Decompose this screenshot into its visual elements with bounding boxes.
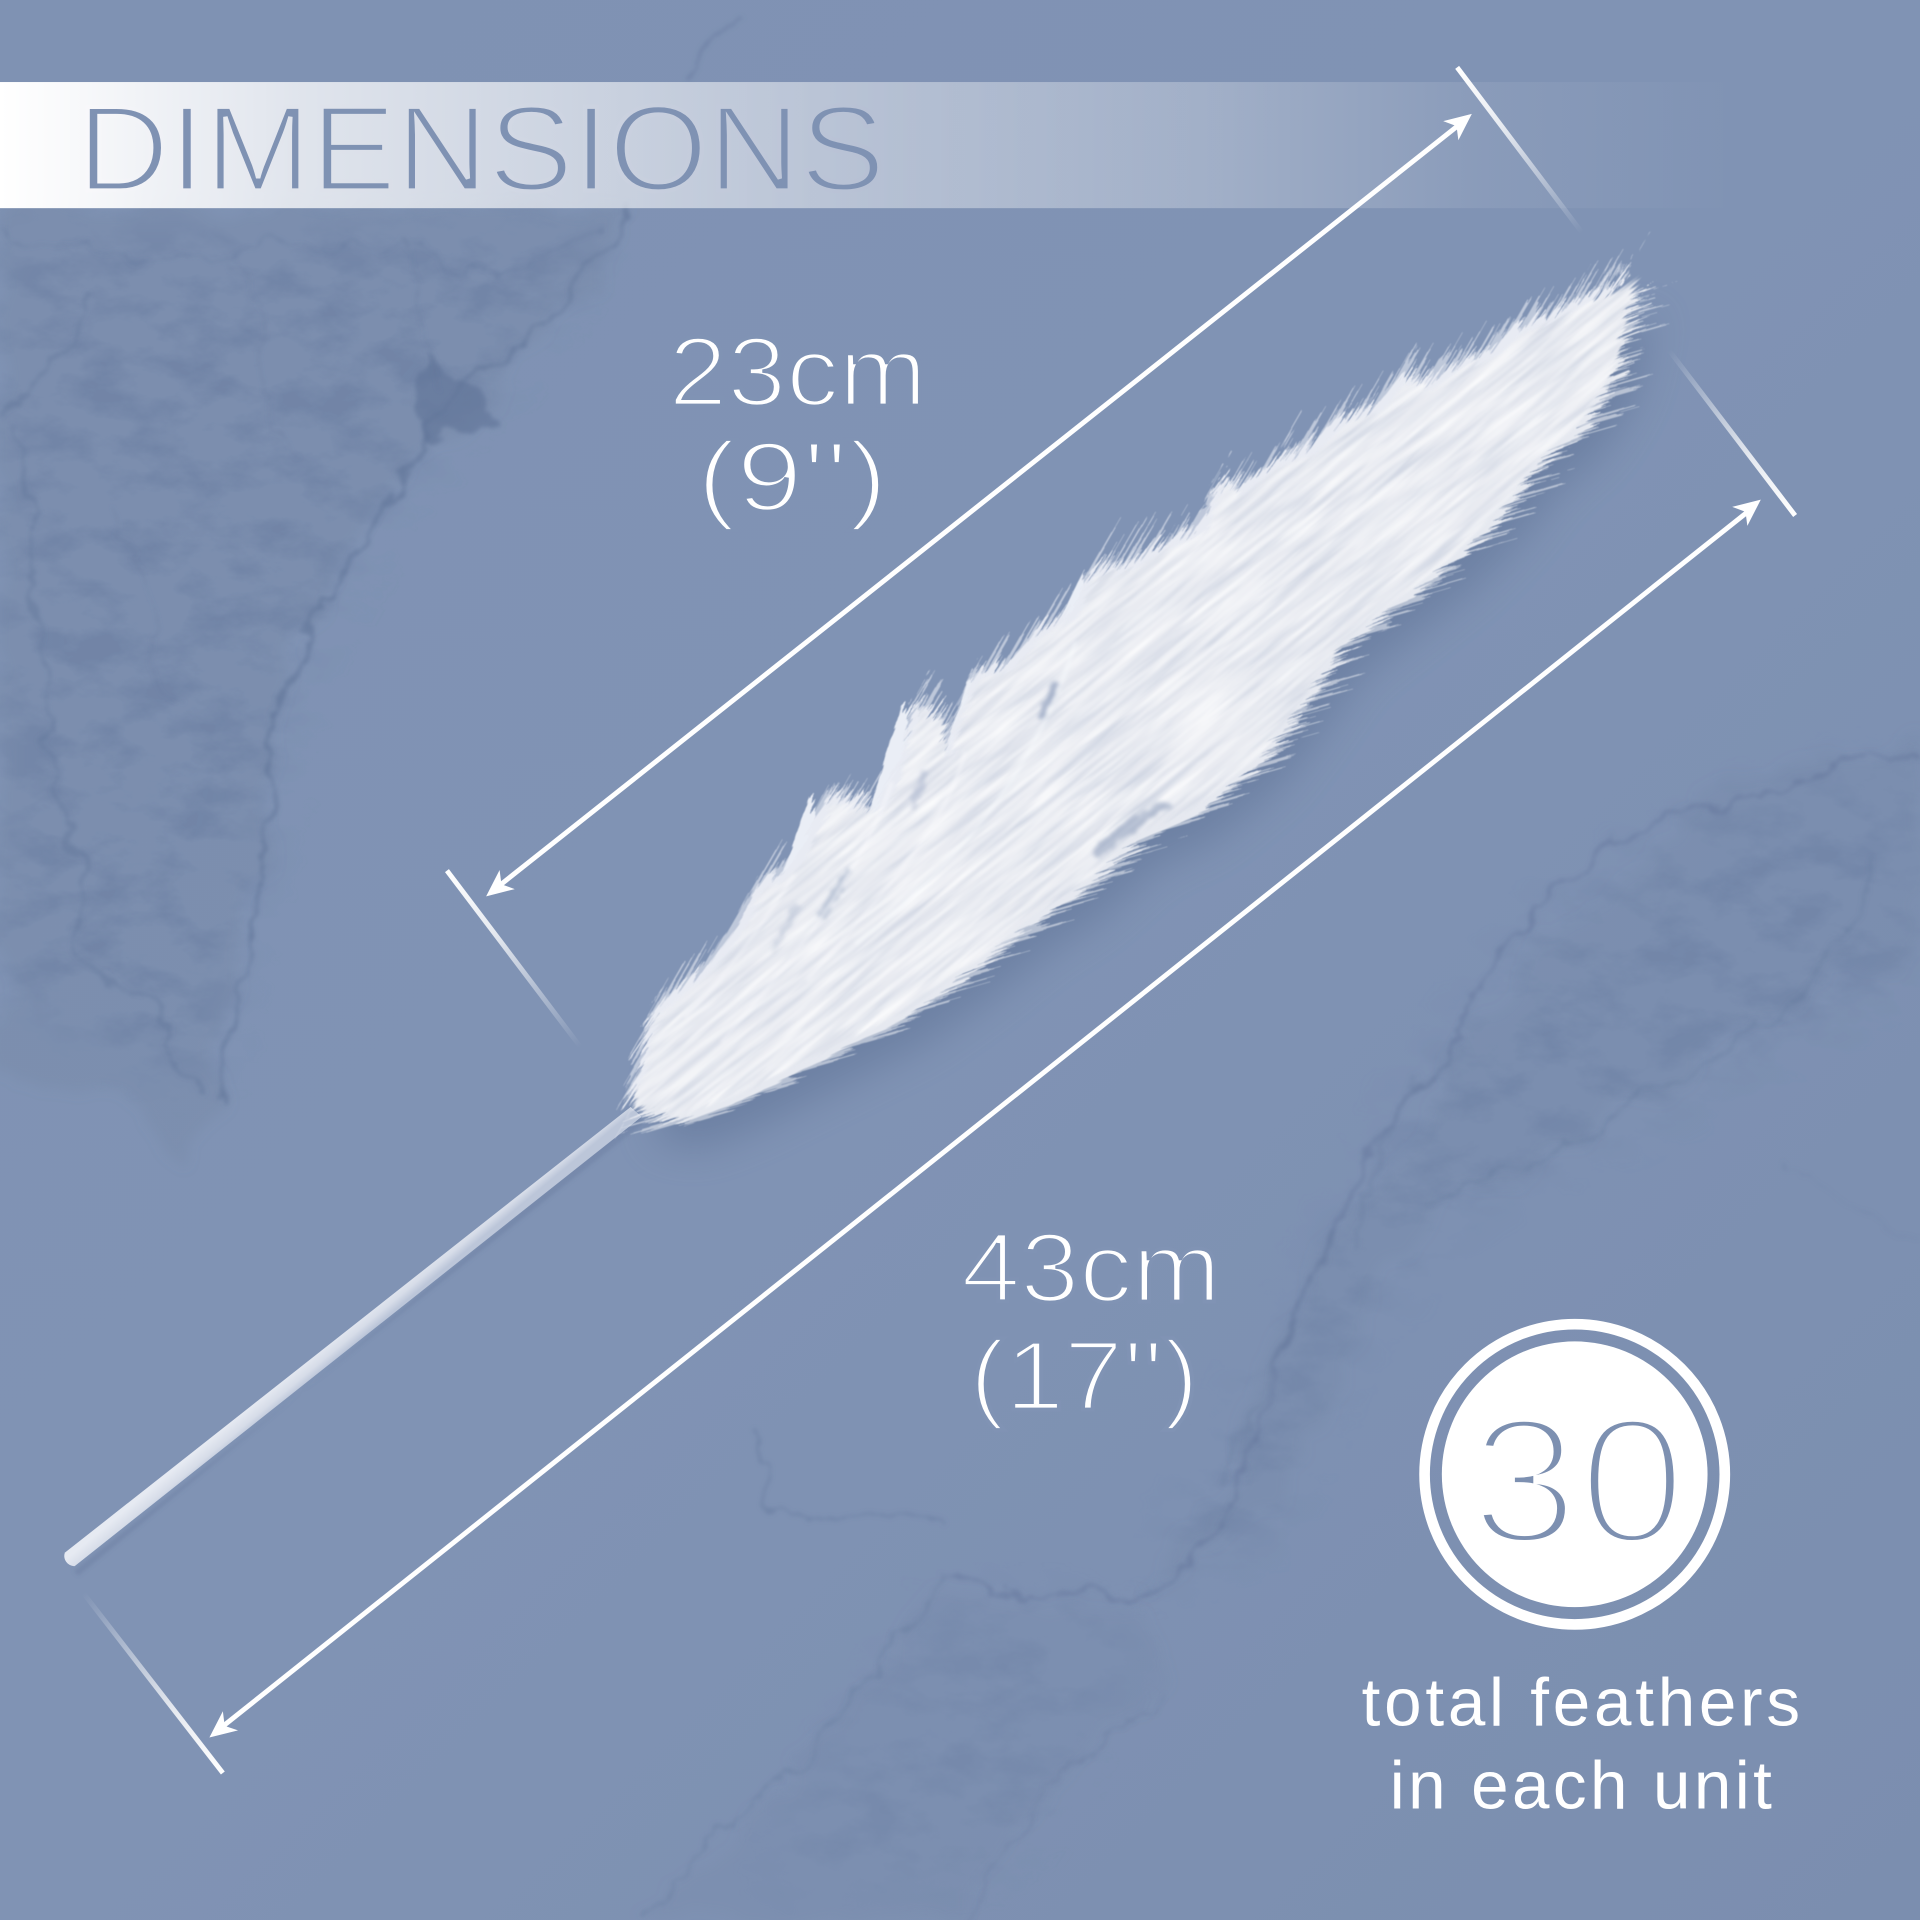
tick: 43cm lower [83,1593,223,1773]
title: DIMENSIONS: DIMENSIONS [77,80,885,216]
number: 30: 30 [1471,1381,1686,1582]
caption: total feathers in each unit: total feathers [1362,1665,1800,1740]
tick: 23cm upper [1457,67,1582,233]
label: 43cm (17'') [961,1213,1221,1430]
tick: 23cm lower [447,871,580,1047]
label: 23cm (9''): 23cm [669,316,927,426]
badge: 30 [1425,1324,1725,1624]
title banner [0,80,1739,216]
plume gaps [774,686,1166,949]
arrowhead bottom [209,1711,238,1738]
tick: 43cm upper [1669,350,1795,516]
label: 23cm (9'') [669,316,927,532]
label: 43cm (17''): 43cm [961,1213,1221,1323]
feather plume [223,0,1920,1608]
label: 43cm (17''): (17'') [970,1320,1199,1430]
lower inner fibres [346,0,1920,1472]
dimension: 23cm arrow [486,114,1472,896]
caption: total feathers in each unit: in each unit [1390,1749,1772,1824]
plume strands [686,643,1075,1041]
lower wisps [416,23,1865,1393]
caption: total feathers in each unit [1362,1665,1800,1824]
plume core with fibrous shading [223,0,1920,1608]
plume tufts [352,0,1854,1426]
label: 23cm (9''): (9'') [697,422,888,532]
feather shadow [653,311,1658,1149]
arrowhead top [1732,500,1761,526]
dimension: 43cm arrow [209,500,1761,1738]
feather stem [64,1107,644,1576]
upper wisps [267,0,1920,1531]
arrowhead top [1443,114,1472,140]
arrowhead bottom [486,870,515,896]
upper inner fibres [239,0,1920,1573]
